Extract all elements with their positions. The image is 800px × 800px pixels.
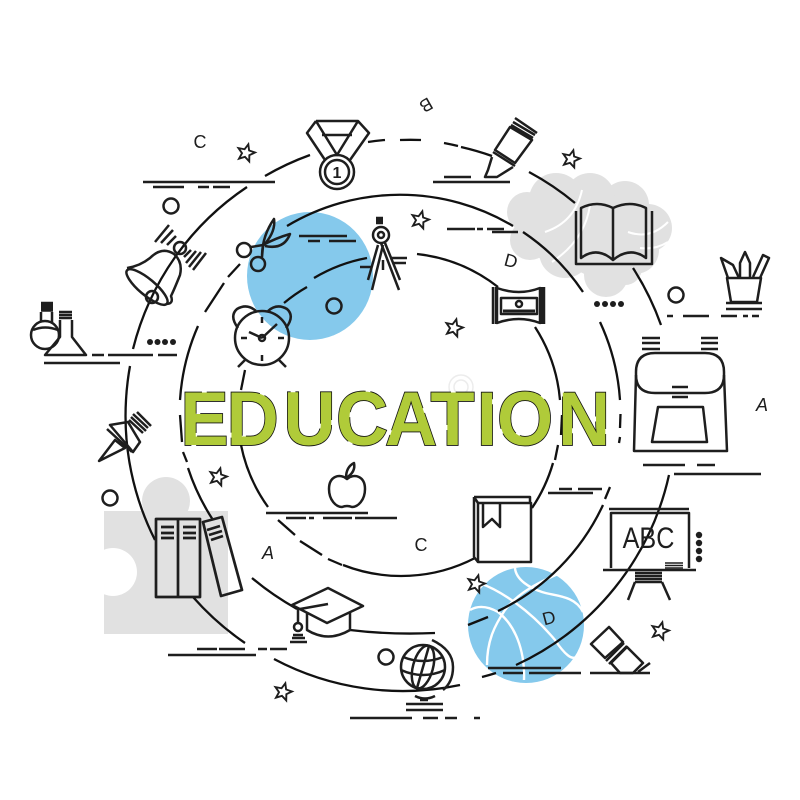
icon: lab flasks [31,303,86,355]
icon: medal: 1 [333,165,342,182]
grey brain background [507,173,672,297]
icon: globe [401,640,453,710]
middle dashed ring [180,195,620,634]
decorative small circles [102,198,684,664]
icon: blackboard: ABC [623,521,674,554]
scattered letters: B [416,93,436,117]
globe underline dashes [350,717,480,719]
scattered letters: A [755,395,768,415]
underline dashes in blue circle [299,236,356,241]
icon: alarm clock [233,306,291,367]
icon: push pin [99,412,151,461]
backpack underline dashes [643,465,761,474]
dots: flask [147,339,176,345]
apple underline dashes [266,513,397,518]
icon: graduation cap [290,588,363,642]
icon: books [156,517,242,597]
icon: backpack [634,338,727,451]
watermark spiral [449,375,473,399]
scattered letters: A [261,543,274,563]
icon: pencil sharpener [493,287,544,324]
blue basketball background [468,567,584,683]
dashes near compass [447,229,518,232]
scattered letters: C [194,132,206,152]
dots: brain [594,301,624,307]
grey puzzle piece background [89,477,228,634]
icon: school bell [122,225,206,310]
pencil cup underline dashes [667,315,759,317]
blue circle background [247,212,373,340]
icon: medal [307,121,369,189]
title: EDUCATION [181,376,610,461]
icon: highlighter [485,118,537,177]
icon: scissors [237,219,290,271]
bottom left underline dashes [168,649,287,655]
book side dashes [548,489,602,493]
icon: compass [360,218,407,290]
basketball underline dashes [488,668,581,673]
scattered letters [194,93,768,629]
icon: pencil cup [721,252,769,309]
icon: closed book with bookmark [474,497,531,562]
decorative stars [208,142,671,701]
icon: eraser [590,627,650,673]
scattered letters: D [502,250,520,272]
flask underline dashes [44,355,177,363]
scattered letters: C [414,535,428,555]
icon: apple [329,463,365,507]
top left underline dashes [143,182,275,187]
scattered letters: D [540,607,558,629]
outer dashed ring [126,140,669,691]
inner dashed ring [241,254,562,576]
highlighter underline [433,177,510,182]
icon: open book [576,204,652,264]
icon: blackboard [603,509,702,600]
